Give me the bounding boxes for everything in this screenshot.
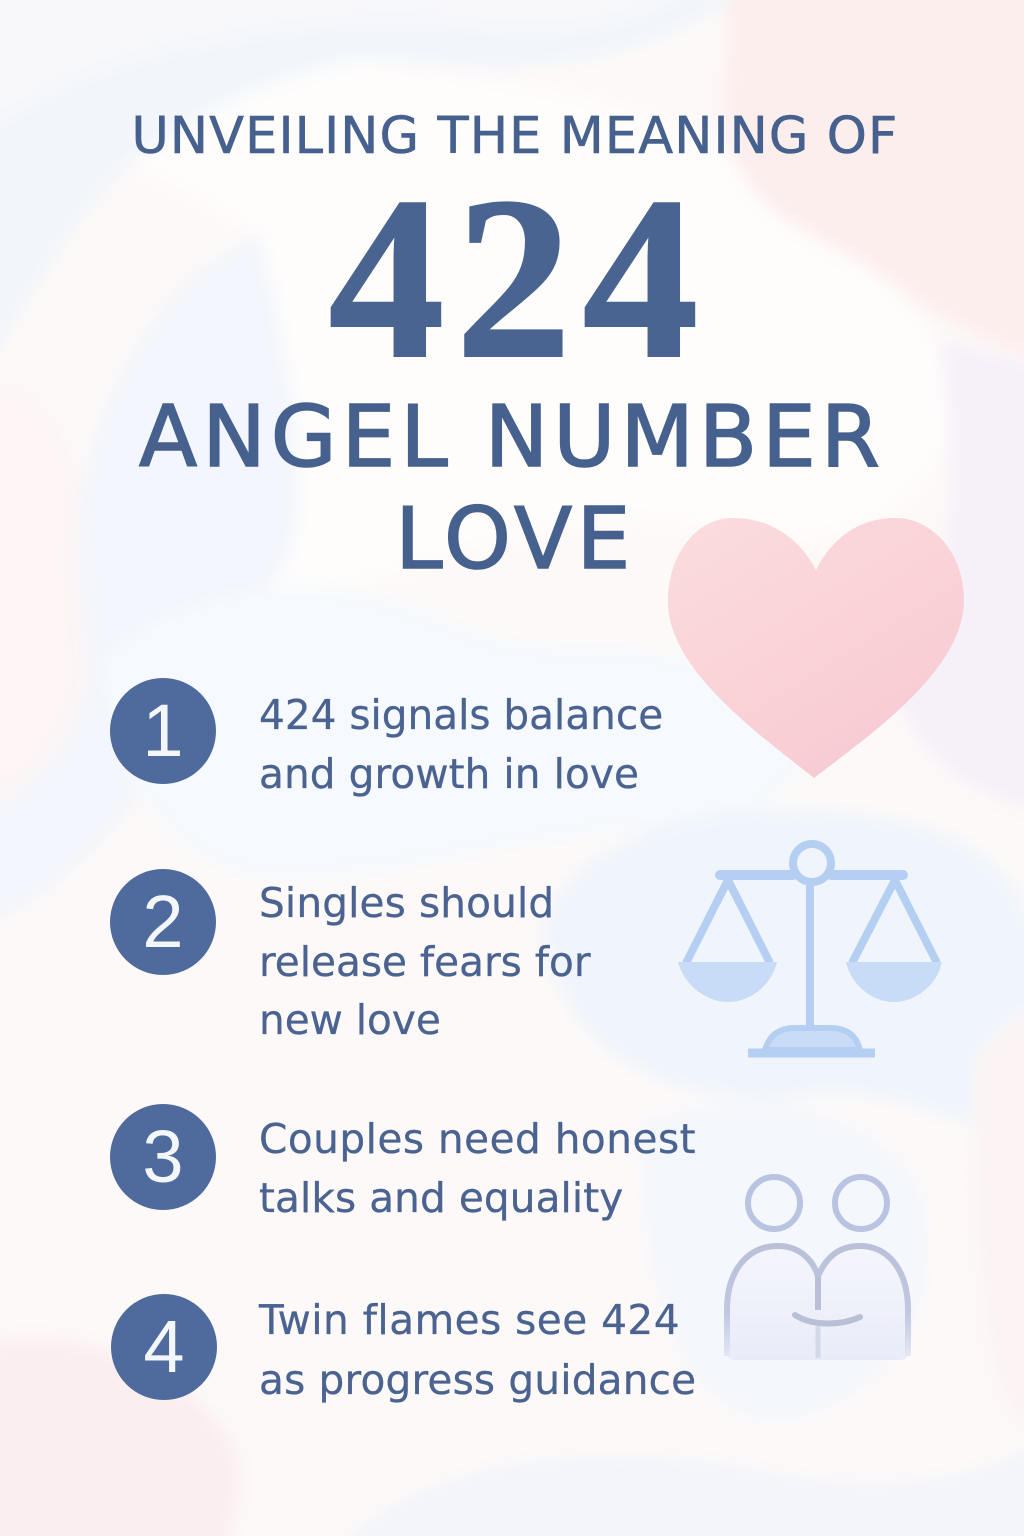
step 2 text — [259, 879, 591, 1044]
step 4 — [111, 1294, 696, 1404]
step 1 text — [259, 691, 663, 798]
step 1 text: 424 signals balance — [259, 691, 663, 739]
step 3 text — [259, 1115, 696, 1222]
step 1 text: and growth in love — [259, 750, 639, 798]
step 3 number: 3 — [142, 1115, 184, 1198]
icon: heart — [668, 518, 964, 778]
title: angel number: ANGEL NUMBER — [139, 388, 885, 487]
step 1 number: 1 — [142, 689, 184, 772]
step 1 — [110, 678, 663, 798]
step 2 number — [110, 869, 216, 975]
title: 424: 424 — [328, 150, 710, 407]
step 4 text: Twin flames see 424 — [259, 1296, 680, 1344]
step 2 text: release fears for — [259, 938, 591, 986]
step 4 number — [111, 1294, 217, 1400]
step 2 — [110, 869, 591, 1044]
step 4 text — [258, 1296, 696, 1404]
step 4 number: 4 — [143, 1305, 185, 1388]
step 4 text: as progress guidance — [259, 1356, 696, 1404]
icon: embracing couple — [724, 1174, 911, 1360]
step 3 text: talks and equality — [259, 1174, 623, 1222]
step 1 number — [110, 678, 216, 784]
title: love: LOVE — [395, 490, 635, 589]
icon: balance scale — [678, 840, 942, 1058]
step 2 text: Singles should — [259, 879, 554, 927]
step 3 — [110, 1104, 696, 1222]
step 3 number — [110, 1104, 216, 1210]
title: kicker line: UNVEILING THE MEANING OF — [132, 107, 898, 166]
step 2 number: 2 — [142, 880, 184, 963]
step 3 text: Couples need honest — [259, 1115, 696, 1163]
step 2 text: new love — [259, 996, 441, 1044]
